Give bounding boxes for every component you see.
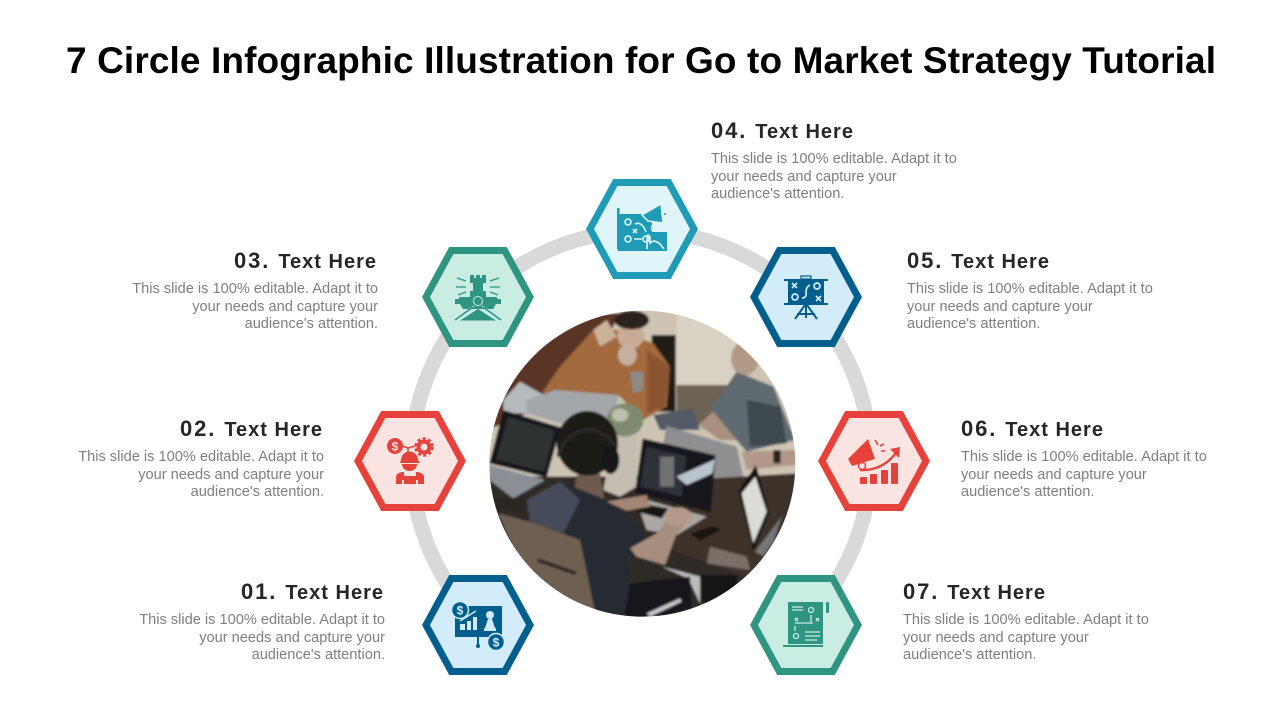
icon: megaphone with growth bars bbox=[848, 439, 900, 484]
icon: presentation board with chart and dollars: $ bbox=[457, 604, 464, 618]
text block 04: audience's attention. bbox=[711, 186, 844, 202]
icon: chess rook on a banner bbox=[455, 275, 501, 320]
text block 04: This slide is 100% editable. Adapt it to bbox=[711, 151, 957, 167]
hexagon 01 bbox=[426, 578, 530, 672]
heading 03: 03. Text Here bbox=[234, 248, 377, 273]
text block 03: your needs and capture your bbox=[192, 299, 378, 315]
item 05 bbox=[754, 248, 1153, 344]
text block 01: audience's attention. bbox=[252, 647, 385, 663]
icon: presentation board with chart and dollars: $ bbox=[493, 636, 500, 650]
text block 02: audience's attention. bbox=[191, 484, 324, 500]
text block 05: This slide is 100% editable. Adapt it to bbox=[907, 281, 1153, 297]
text block 05: your needs and capture your bbox=[907, 299, 1093, 315]
text block 05: audience's attention. bbox=[907, 316, 1040, 332]
text block 07: your needs and capture your bbox=[903, 630, 1089, 646]
heading 04: 04. Text Here bbox=[711, 118, 854, 143]
text block 01: This slide is 100% editable. Adapt it to bbox=[139, 612, 385, 628]
heading 05: 05. Text Here bbox=[907, 248, 1050, 273]
item 01 bbox=[139, 578, 530, 672]
item 06 bbox=[822, 414, 1207, 508]
text block 06: This slide is 100% editable. Adapt it to bbox=[961, 449, 1207, 465]
ring connecting the hexagons bbox=[412, 231, 870, 623]
item 04 bbox=[590, 118, 957, 276]
icon: worker with dollar and gear: $ bbox=[392, 440, 399, 454]
central photo: team working on laptops bbox=[489, 310, 796, 617]
text block 06: audience's attention. bbox=[961, 484, 1094, 500]
text block 03: audience's attention. bbox=[245, 316, 378, 332]
text block 07: This slide is 100% editable. Adapt it to bbox=[903, 612, 1149, 628]
item 02 bbox=[78, 414, 462, 508]
item 07 bbox=[754, 578, 1149, 672]
icon: tactics board on easel bbox=[784, 276, 828, 319]
text block 04: your needs and capture your bbox=[711, 169, 897, 185]
hexagon 03 bbox=[426, 250, 530, 344]
text block 02: This slide is 100% editable. Adapt it to bbox=[78, 449, 324, 465]
text block 06: your needs and capture your bbox=[961, 467, 1147, 483]
icon: presentation board with chart and dollars bbox=[452, 602, 504, 650]
icon: strategy map with megaphone bbox=[617, 204, 667, 251]
heading 06: 06. Text Here bbox=[961, 416, 1104, 441]
hexagon 07 bbox=[754, 578, 858, 672]
icon: worker with dollar and gear bbox=[387, 438, 432, 484]
heading 01: 01. Text Here bbox=[241, 579, 384, 604]
hexagon 04 bbox=[590, 182, 694, 276]
title: 7 Circle Infographic Illustration for Go to Market Strategy Tutorial bbox=[66, 40, 1216, 81]
item 03 bbox=[132, 248, 530, 344]
icon: strategy scroll bbox=[783, 602, 829, 647]
text block 03: This slide is 100% editable. Adapt it to bbox=[132, 281, 378, 297]
text block 01: your needs and capture your bbox=[199, 630, 385, 646]
heading 02: 02. Text Here bbox=[180, 416, 323, 441]
hexagon 02 bbox=[358, 414, 462, 508]
hexagon 05 bbox=[754, 250, 858, 344]
text block 02: your needs and capture your bbox=[138, 467, 324, 483]
hexagon 06 bbox=[822, 414, 926, 508]
text block 07: audience's attention. bbox=[903, 647, 1036, 663]
heading 07: 07. Text Here bbox=[903, 579, 1046, 604]
